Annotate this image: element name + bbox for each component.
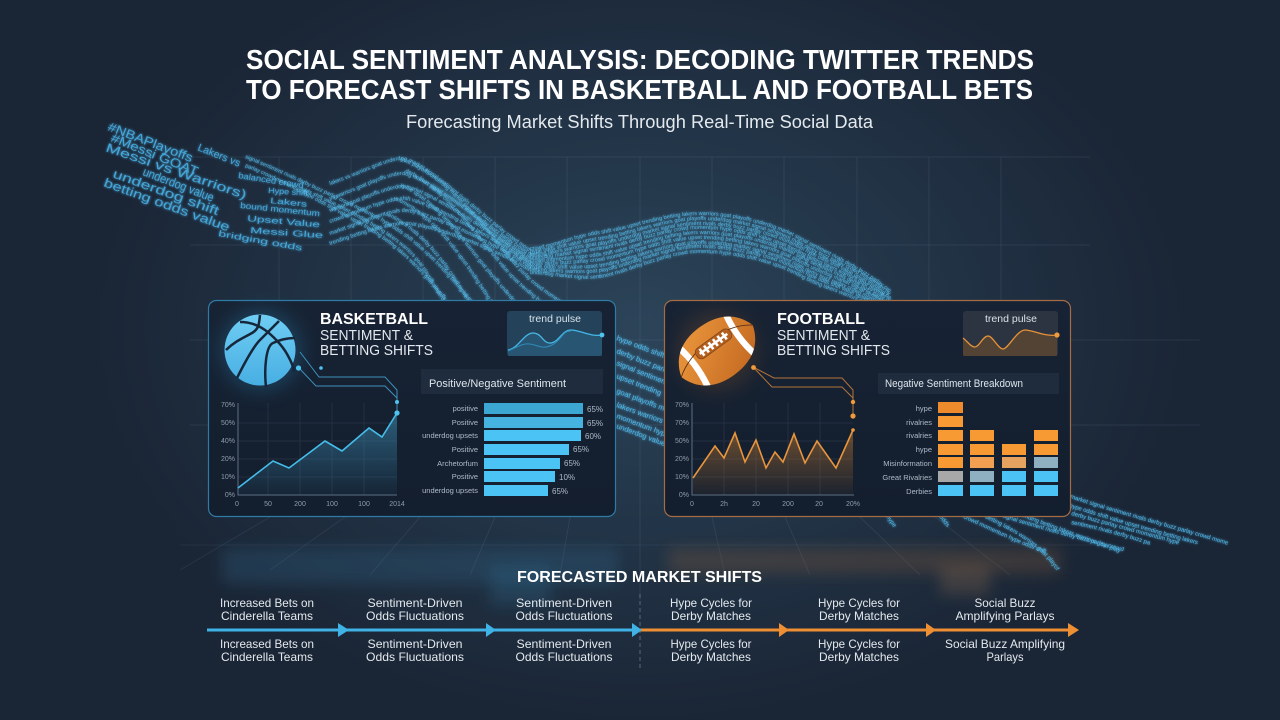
background grid [180,157,1200,600]
stream strands: crowd momentum hype odds shift value upset trending betting lakers warriors goat playoffs underdog market signal sentiment rivals derby buzz parlay crowd momentum hype odds shift value upset trending betting lakers warriors goat [530,230,886,300]
line chart: basketball sentiment: 70% [221,402,235,409]
bar chart: sentiment: Archetorfum [437,459,478,468]
bar chart: sentiment: underdog upsets [422,431,478,440]
stream strands: vs warriors goat playoffs underdog market signal sentiment rivals derby buzz parlay crowd momentum hype odds shift value upset trending betting lakers goat [328,170,532,256]
subtitle: Forecasting Market Shifts Through Real-Time Social Data [406,112,874,132]
hashtag text: Upset Value [247,213,321,229]
timeline labels below: Odds Fluctuations [366,650,464,664]
hashtag text: Lakers [270,196,308,209]
timeline labels below: Cinderella Teams [221,650,313,664]
line chart: football sentiment [675,402,860,508]
timeline labels above: Hype Cycles for [670,596,752,610]
timeline labels below: Social Buzz Amplifying [945,637,1065,651]
stream segment below football panel: hype [886,517,897,528]
timeline labels below: Increased Bets on [220,637,314,651]
title: SOCIAL SENTIMENT ANALYSIS: DECODING TWITTER TRENDS [246,44,1034,75]
hashtag text: #Messi GOAT [109,131,201,179]
icon: football [672,306,762,396]
stacked block chart: Great Rivalries [882,473,932,482]
stream segment beside basketball panel: derby buzz parlay crowd [616,348,664,372]
stream strands: momentum hype odds shift value upset trending betting lakers warriors goat playoffs underdog market signal sentiment rivals derby buzz parlay crowd [395,196,493,300]
timeline labels below: Odds Fluctuations [516,650,612,664]
hashtag text: betting odds value [102,176,232,234]
panel heading: SENTIMENT & [777,327,870,344]
connector lines [751,365,856,432]
stream strands: hype odds shift value upset trending betting lakers warriors goat playoffs underdog market signal sentiment rivals derby buzz parlay crowd momentum hype odds shift value upset trending betting lakers warriors goat playoffs [529,214,892,296]
stream segment beside basketball panel: signal sentiment rivals [616,360,664,384]
stream strands: odds shift value upset trending betting lakers warriors goat playoffs underdog market signal sentiment rivals derby buzz parlay crowd [300,187,446,300]
line chart: football sentiment: 70% [675,420,689,427]
stream strands: crowd momentum hype odds shift value upset trending betting lakers warriors goat playoffs underdog market signal sentiment rivals derby buzz parlay crowd [328,195,532,264]
bar chart: sentiment: 65% [552,487,568,496]
timeline labels above: Hype Cycles for [818,596,900,610]
sentiment breakdown header: Negative Sentiment Breakdown [885,378,1023,390]
stream strands: hype odds shift value upset trending betting lakers warriors goat playoffs underdog market signal sentiment rivals derby buzz parlay crowd momentum hype odds shift value upset trending betting lakers warriors goat playoffs [529,238,877,300]
panel heading: BETTING SHIFTS [777,342,890,359]
stacked block chart: hype [916,404,932,413]
timeline labels above: Derby Matches [671,609,751,623]
bar chart: sentiment: 65% [564,459,580,468]
stream segment below football panel: signal sentiment rivals derby buzz parlay crowd momentum hype odds shift value upset [1002,517,1126,552]
timeline labels below [220,637,1065,664]
stacked block chart: rivalries [906,431,932,440]
trend pulse card: trend pulse [985,313,1037,325]
line chart: basketball sentiment: 40% [221,438,235,445]
trend pulse card [507,311,604,356]
line chart: football sentiment: 70% [675,402,689,409]
line chart: basketball sentiment [221,402,405,508]
stream segment below football panel: hype odds shift value upset trending betting lakers warriors goat playoffs underdog market signal [1071,502,1199,546]
timeline labels below: Derby Matches [819,650,899,664]
sentiment bar header: Positive/Negative Sentiment [429,378,566,390]
blurred reflections under panels [222,548,1060,605]
stream strands: goat playoffs underdog market signal sentiment rivals derby buzz parlay crowd momentum hype odds shift value upset trending betting lakers warriors goat playoffs [399,158,562,300]
timeline labels below: Parlays [986,650,1024,664]
stream strands: warriors goat playoffs underdog market signal sentiment rivals derby buzz parlay crowd momentum hype odds shift value upset trending betting lakers warriors [328,184,530,260]
stream strands [244,154,892,300]
hashtag text [102,120,324,253]
stream convergence glow [430,185,530,262]
timeline labels below: Sentiment-Driven [368,637,462,651]
bar chart: sentiment: 10% [559,473,575,482]
stream segment beside basketball panel: underdog value shift [616,424,664,447]
title [246,44,1034,105]
sentiment breakdown header [878,373,1059,394]
line chart: football sentiment: 200 [782,501,794,508]
line chart: football sentiment: 10% [675,474,689,481]
line chart: basketball sentiment: 2014 [389,501,405,508]
line chart: basketball sentiment: 200 [294,501,306,508]
stream segment below football panel [886,494,1230,571]
hashtag text: #NBAPlayoffs [106,120,195,165]
timeline labels above: Social Buzz [974,596,1036,610]
timeline labels below: Hype Cycles for [818,637,900,651]
stream strands: derby buzz parlay crowd momentum hype odds shift value upset trending betting lakers warriors goat playoffs underdog market signal sentiment rivals derby buzz [404,168,542,300]
stream segment below football panel: betting lakers warriors goat playoffs underdog market [984,517,1061,571]
title: TO FORECAST SHIFTS IN BASKETBALL AND FOOTBALL BETS [246,74,1033,105]
stacked block chart: Misinformation [883,459,932,468]
trend pulse card: trend pulse [529,313,581,325]
line chart: basketball sentiment: 50% [221,420,235,427]
hashtag text: Hype shift [268,186,309,198]
stream segment below football panel: trending betting lakers warriors goat playoffs underdog market signal sentiment rivals [1021,517,1122,554]
bar chart: sentiment: underdog upsets [422,486,478,495]
panel heading: BASKETBALL [320,311,428,328]
stream segment below football panel: market signal sentiment rivals derby buzz parlay crowd momentum hype odds shift value upset trending betting lakers warriors [0,0,1229,547]
line chart: football sentiment: 20% [846,501,860,508]
bar chart: sentiment [422,403,603,496]
timeline [207,594,1079,668]
panel heading [777,311,890,359]
stream strands: underdog market signal sentiment rivals derby buzz parlay crowd momentum hype odds shift value upset trending betting lakers warriors goat playoffs underdog market signal sentiment rivals derby buzz parlay crowd [529,224,892,300]
line chart: football sentiment: 50% [675,438,689,445]
bar chart: sentiment: 65% [587,405,603,414]
arrowheads [338,623,1079,637]
stream segment beside basketball panel: goat playoffs market [616,388,664,412]
timeline labels below: Derby Matches [671,650,751,664]
hashtag text: balanced crowd [238,170,305,190]
stream strands: value upset trending betting lakers warriors goat playoffs underdog market signal sentiment rivals derby buzz parlay crowd momentum hype odds shift value [400,183,516,300]
hashtag text: bound momentum [240,200,320,218]
stacked block chart: rivalries [906,418,932,427]
panel heading [320,311,433,359]
line chart: basketball sentiment: 10% [221,474,235,481]
panel heading: SENTIMENT & [320,327,413,344]
forecast heading: FORECASTED MARKET SHIFTS [517,569,762,586]
bar chart: sentiment: 65% [587,419,603,428]
connector lines [296,352,400,416]
line chart: basketball sentiment: 0% [225,492,235,499]
hashtag text: Messi Glue [250,225,324,240]
panel heading: FOOTBALL [777,311,865,328]
stream strands: sentiment rivals derby buzz parlay crowd momentum hype odds shift value upset trending betting lakers warriors goat playoffs underdog market signal [385,212,470,300]
stream strands: market signal sentiment rivals derby buzz parlay crowd momentum hype odds shift value upset trending betting lakers warriors goat playoffs underdog market [328,207,532,268]
stream segment beside basketball panel: hype odds shift value [616,334,664,358]
data stream of social posts [102,120,1230,571]
stream strands: trending betting lakers warriors goat playoffs underdog market signal sentiment rivals derby buzz parlay crowd momentum hype odds shift value upset trending [328,220,530,272]
stream segment beside basketball panel: lakers warriors crowd [616,402,664,424]
bar chart: sentiment: 60% [585,432,601,441]
stream strands: rivals derby buzz parlay crowd momentum hype odds shift value upset trending betting lakers warriors goat playoffs underdog market signal sentiment rivals derby buzz parlay crowd momentum hype odds shift value upset [530,234,882,300]
line chart: football sentiment: 2h [720,501,728,508]
line chart: football sentiment: 20 [752,501,760,508]
timeline labels above: Odds Fluctuations [516,609,612,623]
stream strands: parlay crowd momentum hype odds shift value upset trending betting lakers warriors goat playoffs underdog market signal sentiment rivals derby buzz parlay crowd momentum [244,163,448,300]
icon: basketball [221,310,301,390]
stream segment beside basketball panel: upset trending betting [616,374,662,398]
line chart: football sentiment: 0% [679,492,689,499]
stacked block chart [882,402,1058,496]
stream strands: signal sentiment rivals derby buzz parlay crowd momentum hype odds shift value upset trending betting lakers warriors goat playoffs underdog market signal sentiment rivals derby [244,154,474,300]
infographic canvas [102,14,1230,668]
line chart: basketball sentiment: 100 [358,501,370,508]
line chart: football sentiment: 20 [815,501,823,508]
stacked block chart: Derbies [906,487,932,496]
timeline labels above: Amplifying Parlays [956,609,1054,623]
line chart: football sentiment: 0 [690,501,694,508]
stream segment beside basketball panel: momentum hype odds [616,414,664,438]
panel heading: BETTING SHIFTS [320,342,433,359]
stream segment below football panel: crowd momentum hype odds shift value upset trending betting [962,517,1048,554]
timeline labels above: Sentiment-Driven [368,596,462,610]
bar chart: sentiment: Positive [452,472,478,481]
hashtag text: Messi vs Warriors) [104,141,249,202]
panel background [664,300,1070,516]
timeline labels above: Increased Bets on [220,596,314,610]
timeline labels above: Derby Matches [819,609,899,623]
line chart: basketball sentiment: 0 [235,501,239,508]
timeline labels above: Odds Fluctuations [366,609,464,623]
hashtag text: bridging odds [218,228,303,253]
bar chart: sentiment: 65% [573,445,589,454]
stacked block chart: hype [916,445,932,454]
line chart: basketball sentiment: 50 [264,501,272,508]
stream segment beside basketball panel [616,334,664,447]
timeline labels above: Cinderella Teams [221,609,313,623]
stream strands: betting lakers warriors goat playoffs underdog market signal sentiment rivals derby buzz parlay crowd momentum hype odds shift value upset trending betting lakers warriors goat playoffs underdog market signal sentiment [529,244,872,300]
panel: basketball [208,300,616,516]
hashtag text: underdog value [141,165,216,205]
timeline labels above: Sentiment-Driven [516,596,612,610]
panel background [208,300,616,516]
stream strands: crowd momentum hype odds shift value upset trending betting lakers warriors goat playoffs underdog market signal sentiment rivals derby buzz parlay crowd momentum hype odds shift value upset trending betting lakers warriors goat [529,210,892,293]
stream segment below football panel: derby buzz parlay crowd momentum hype odds shift value upset trending betting lakers [1070,510,1180,546]
bar chart: sentiment: Positive [452,445,478,454]
stream segment below football panel: sentiment rivals derby buzz parlay crowd momentum [1070,520,1152,546]
line chart: basketball sentiment: 100 [326,501,338,508]
panel: football [663,300,1070,516]
sentiment bar header [421,369,603,394]
stream strands: lakers vs warriors goat underdog market signal sentiment rivals derby buzz parlay crowd momentum hype odds shift value upset trending betting lakers goat [328,155,530,252]
timeline labels below: Hype Cycles for [670,637,752,651]
stream strands: underdog market signal sentiment rivals derby buzz parlay crowd momentum hype odds shift value upset trending betting lakers warriors goat playoffs underdog market signal sentiment rivals derby buzz parlay crowd [529,248,864,300]
stream strands: betting lakers warriors goat playoffs underdog market signal sentiment rivals derby buzz parlay crowd momentum hype odds shift value upset trending betting lakers warriors goat playoffs underdog market signal sentiment [529,220,892,300]
timeline labels above [220,596,1054,623]
timeline labels below: Sentiment-Driven [516,637,612,651]
bar chart: sentiment: Positive [452,418,478,427]
hashtag text: underdog shift [111,167,222,218]
bar chart: sentiment: positive [453,404,478,413]
trend pulse card [963,311,1060,356]
line chart: basketball sentiment: 20% [221,456,235,463]
line chart: football sentiment: 20% [675,456,689,463]
hashtag text: Lakers vs [196,142,242,170]
stream segment below football panel: odds [938,517,950,528]
